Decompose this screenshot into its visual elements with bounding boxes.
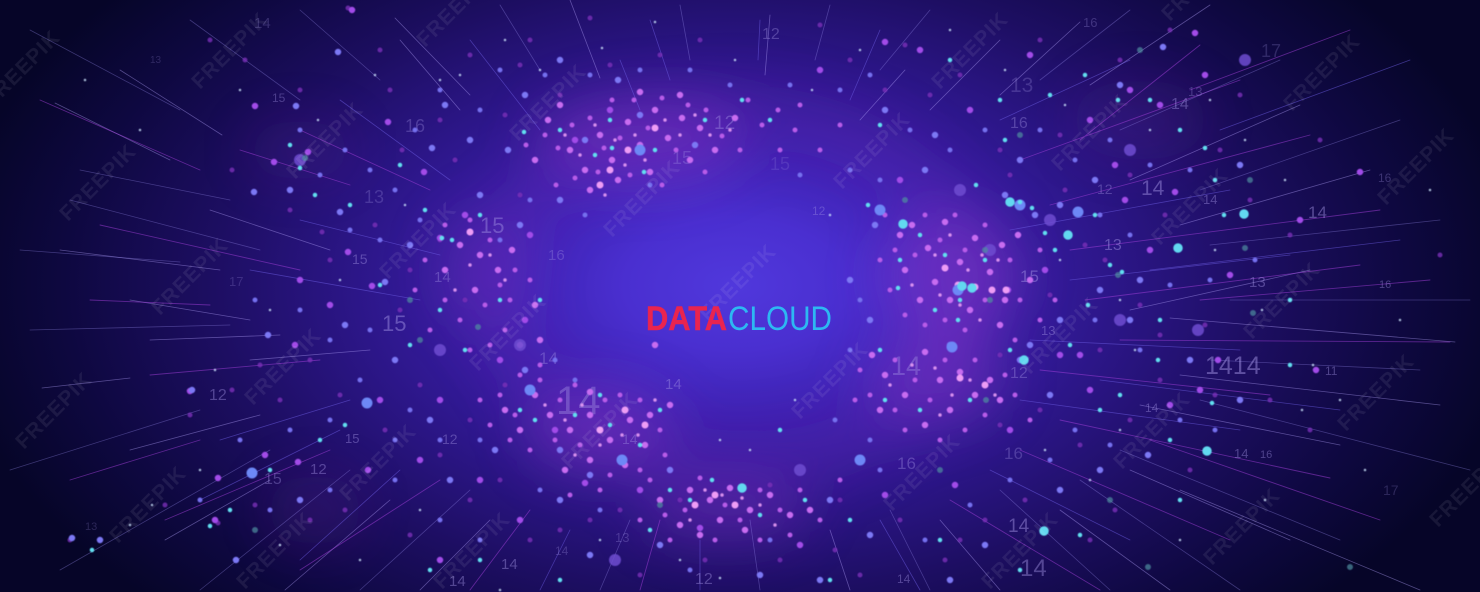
floating number labels: 13 <box>1249 274 1266 291</box>
floating number labels: 14 <box>1234 446 1248 461</box>
watermarks: FREEPIK <box>11 368 97 454</box>
floating number labels: 16 <box>1260 449 1272 461</box>
floating number labels: 12 <box>695 571 713 588</box>
dots: lilac ring filler <box>415 98 1055 540</box>
dots: large dim violet <box>300 60 1245 560</box>
floating number labels: 13 <box>150 55 162 66</box>
floating number labels: 12 <box>714 113 735 134</box>
watermarks: FREEPIK <box>429 508 515 592</box>
dots: large blue <box>252 150 1078 473</box>
watermarks: FREEPIK <box>599 156 685 242</box>
watermarks: FREEPIK <box>1199 484 1285 570</box>
floating number labels: 17 <box>229 274 243 289</box>
floating number labels: 13 <box>1041 323 1055 338</box>
watermarks: FREEPIK <box>1373 124 1459 210</box>
watermarks: FREEPIK <box>829 108 915 194</box>
floating number labels: 13 <box>615 530 629 545</box>
floating number labels: 11 <box>1325 364 1338 378</box>
floating number labels: 13 <box>364 187 384 207</box>
purple nebula glows <box>245 80 1210 545</box>
floating number labels: 14 <box>891 351 921 381</box>
floating number labels: 13 <box>1104 237 1122 254</box>
floating number labels: 14 <box>1141 177 1165 200</box>
floating number labels: 14 <box>1171 96 1189 113</box>
dots: pink dust <box>455 115 998 525</box>
floating number labels: 15 <box>352 251 368 267</box>
floating number labels: 16 <box>1004 444 1023 463</box>
floating number labels: 16 <box>548 247 565 264</box>
watermarks: FREEPIK <box>1017 293 1103 379</box>
watermarks: FREEPIK <box>505 60 591 146</box>
dots: violet mid <box>190 10 1360 560</box>
floating number labels: 12 <box>1097 181 1113 197</box>
floating number labels: 14 <box>665 376 682 393</box>
floating number labels: 15 <box>272 91 286 105</box>
floating number labels: 16 <box>1010 115 1028 132</box>
title word: CLOUD: CLOUD <box>728 300 832 338</box>
dots: pink highlights <box>470 128 1006 505</box>
watermarks: FREEPIK <box>335 420 421 506</box>
dots: large cyan <box>742 202 1244 531</box>
floating number labels: 13 <box>1010 74 1033 97</box>
floating number labels: 16 <box>897 454 916 473</box>
watermarks: FREEPIK <box>465 290 551 376</box>
floating number labels: 14 <box>501 556 518 573</box>
floating number labels: 15 <box>480 213 504 238</box>
floating number labels: 12 <box>310 461 327 478</box>
dots: lilac clusters <box>445 92 1030 535</box>
watermarks: FREEPIK <box>1333 350 1419 436</box>
watermarks: FREEPIK <box>879 430 965 516</box>
floating number labels: 12 <box>812 204 826 218</box>
title: DATA CLOUD <box>646 300 832 338</box>
watermarks: FREEPIK <box>977 508 1063 592</box>
watermarks: FREEPIK <box>695 240 781 326</box>
floating number labels: 12 <box>762 26 780 43</box>
watermarks: FREEPIK <box>1147 164 1233 250</box>
watermarks: FREEPIK <box>1047 90 1133 176</box>
floating number labels: 14 <box>434 269 451 286</box>
floating number labels: 17 <box>1261 41 1281 61</box>
floating number labels: 15 <box>770 154 790 174</box>
floating number labels: 1414 <box>1205 352 1261 380</box>
floating number labels: 12 <box>1010 365 1028 382</box>
floating number labels: 14 <box>897 572 911 586</box>
floating number labels: 14 <box>1308 203 1327 222</box>
floating number labels: 17 <box>1383 482 1399 498</box>
watermarks: FREEPIK <box>55 140 141 226</box>
floating number labels: 16 <box>1083 15 1097 30</box>
floating number labels: 14 <box>1145 401 1159 415</box>
watermarks: FREEPIK <box>187 8 273 94</box>
floating number labels: 14 <box>539 349 558 368</box>
watermarks: FREEPIK <box>1239 258 1325 344</box>
floating number labels: 16 <box>1379 279 1391 291</box>
watermarks: FREEPIK <box>282 98 368 184</box>
floating number labels: 14 <box>254 15 271 32</box>
floating number labels: 16 <box>405 116 425 136</box>
floating number labels: 15 <box>264 471 282 488</box>
watermarks: FREEPIK <box>240 324 326 410</box>
title word: DATA: DATA <box>646 300 727 338</box>
floating number labels: 14 <box>1203 192 1217 207</box>
watermarks: FREEPIK <box>787 338 873 424</box>
floating number labels: 13 <box>1188 84 1202 99</box>
floating number labels: 15 <box>345 431 359 446</box>
watermarks: FREEPIK <box>557 388 643 474</box>
dots: muted teal <box>255 50 1350 567</box>
floating number labels: 16 <box>1378 171 1392 185</box>
floating number labels: 14 <box>555 544 569 558</box>
watermarks: FREEPIK <box>1279 30 1365 116</box>
watermarks: FREEPIK <box>1109 388 1195 474</box>
floating number labels: 12 <box>442 431 458 447</box>
watermarks: FREEPIK <box>232 508 318 592</box>
floating number labels: 15 <box>382 311 406 336</box>
floating number labels: 14 <box>1020 555 1047 582</box>
floating number labels: 13 <box>85 521 97 533</box>
watermarks: FREEPIK <box>105 462 191 548</box>
dots: periwinkle filler <box>200 70 1255 570</box>
watermarks: FREEPIK <box>375 198 461 284</box>
dots: periwinkle blue <box>72 47 1240 580</box>
floating number labels: 15 <box>672 148 692 168</box>
dots: cyan sparks <box>92 60 1290 580</box>
floating number labels: 12 <box>209 387 227 404</box>
floating number labels: 14 <box>449 573 466 590</box>
watermarks: FREEPIK <box>927 8 1013 94</box>
floating number labels: 15 <box>1020 267 1039 286</box>
floating number labels: 14 <box>556 379 600 423</box>
floating number labels: 14 <box>622 431 638 447</box>
floating number labels: 14 <box>1008 516 1030 537</box>
watermarks: FREEPIK <box>147 234 233 320</box>
